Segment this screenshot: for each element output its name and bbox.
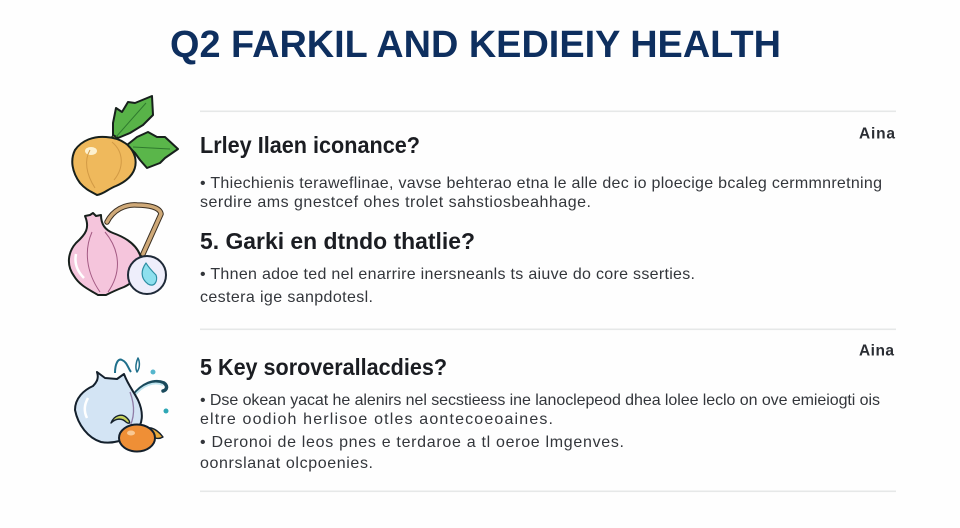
label: second tag: Aina [859,342,894,360]
text block: second answer: • Thnen adoe ted nel enarrire inersneanls ts aiuve do core sserties. [200,266,695,283]
panel: first question [200,126,895,211]
label: first tag: Aina [859,126,895,142]
text block: third answer [200,392,880,472]
text block: first answer: serdire ams gnestcef ohes trolet sahstiosbeahhage. [200,194,591,211]
text block: third answer: • Deronoi de leos pnes e terdaroe a tl oeroe lmgenves. [200,434,624,451]
text block: second answer [200,266,695,306]
title: Q2 FARKIL AND KEDIEIY HEALTH [170,24,781,66]
panel: third question [200,342,894,472]
heading: first question: Lrley Ilaen iconance? [200,132,420,158]
text block: first answer [200,175,882,211]
text block: third answer: oonrslanat olcpoenies. [200,455,373,472]
heading: third question: 5 Key soroverallacdies? [200,354,447,380]
text block: third answer: eltre oodioh herlisoe otles aontecoeoaines. [200,411,553,428]
heading: second question: 5. Garki en dtndo thatlie? [200,228,475,254]
text block: third answer: • Dse okean yacat he alenirs nel secstieess ine lanoclepeod dhea lolee leclo on ove emieiogti ois [200,392,880,409]
icon: water bulb with orange [75,358,168,452]
text block: second answer: cestera ige sanpdotesl. [200,289,373,306]
panel: second question [200,228,695,306]
icon: onion with leaves [72,96,178,195]
text block: first answer: • Thiechienis teraweflinae, vavse behterao etna le alle dec io ploecige bcaleg cermmnretning [200,175,882,192]
icon: garlic with drop [69,205,166,295]
